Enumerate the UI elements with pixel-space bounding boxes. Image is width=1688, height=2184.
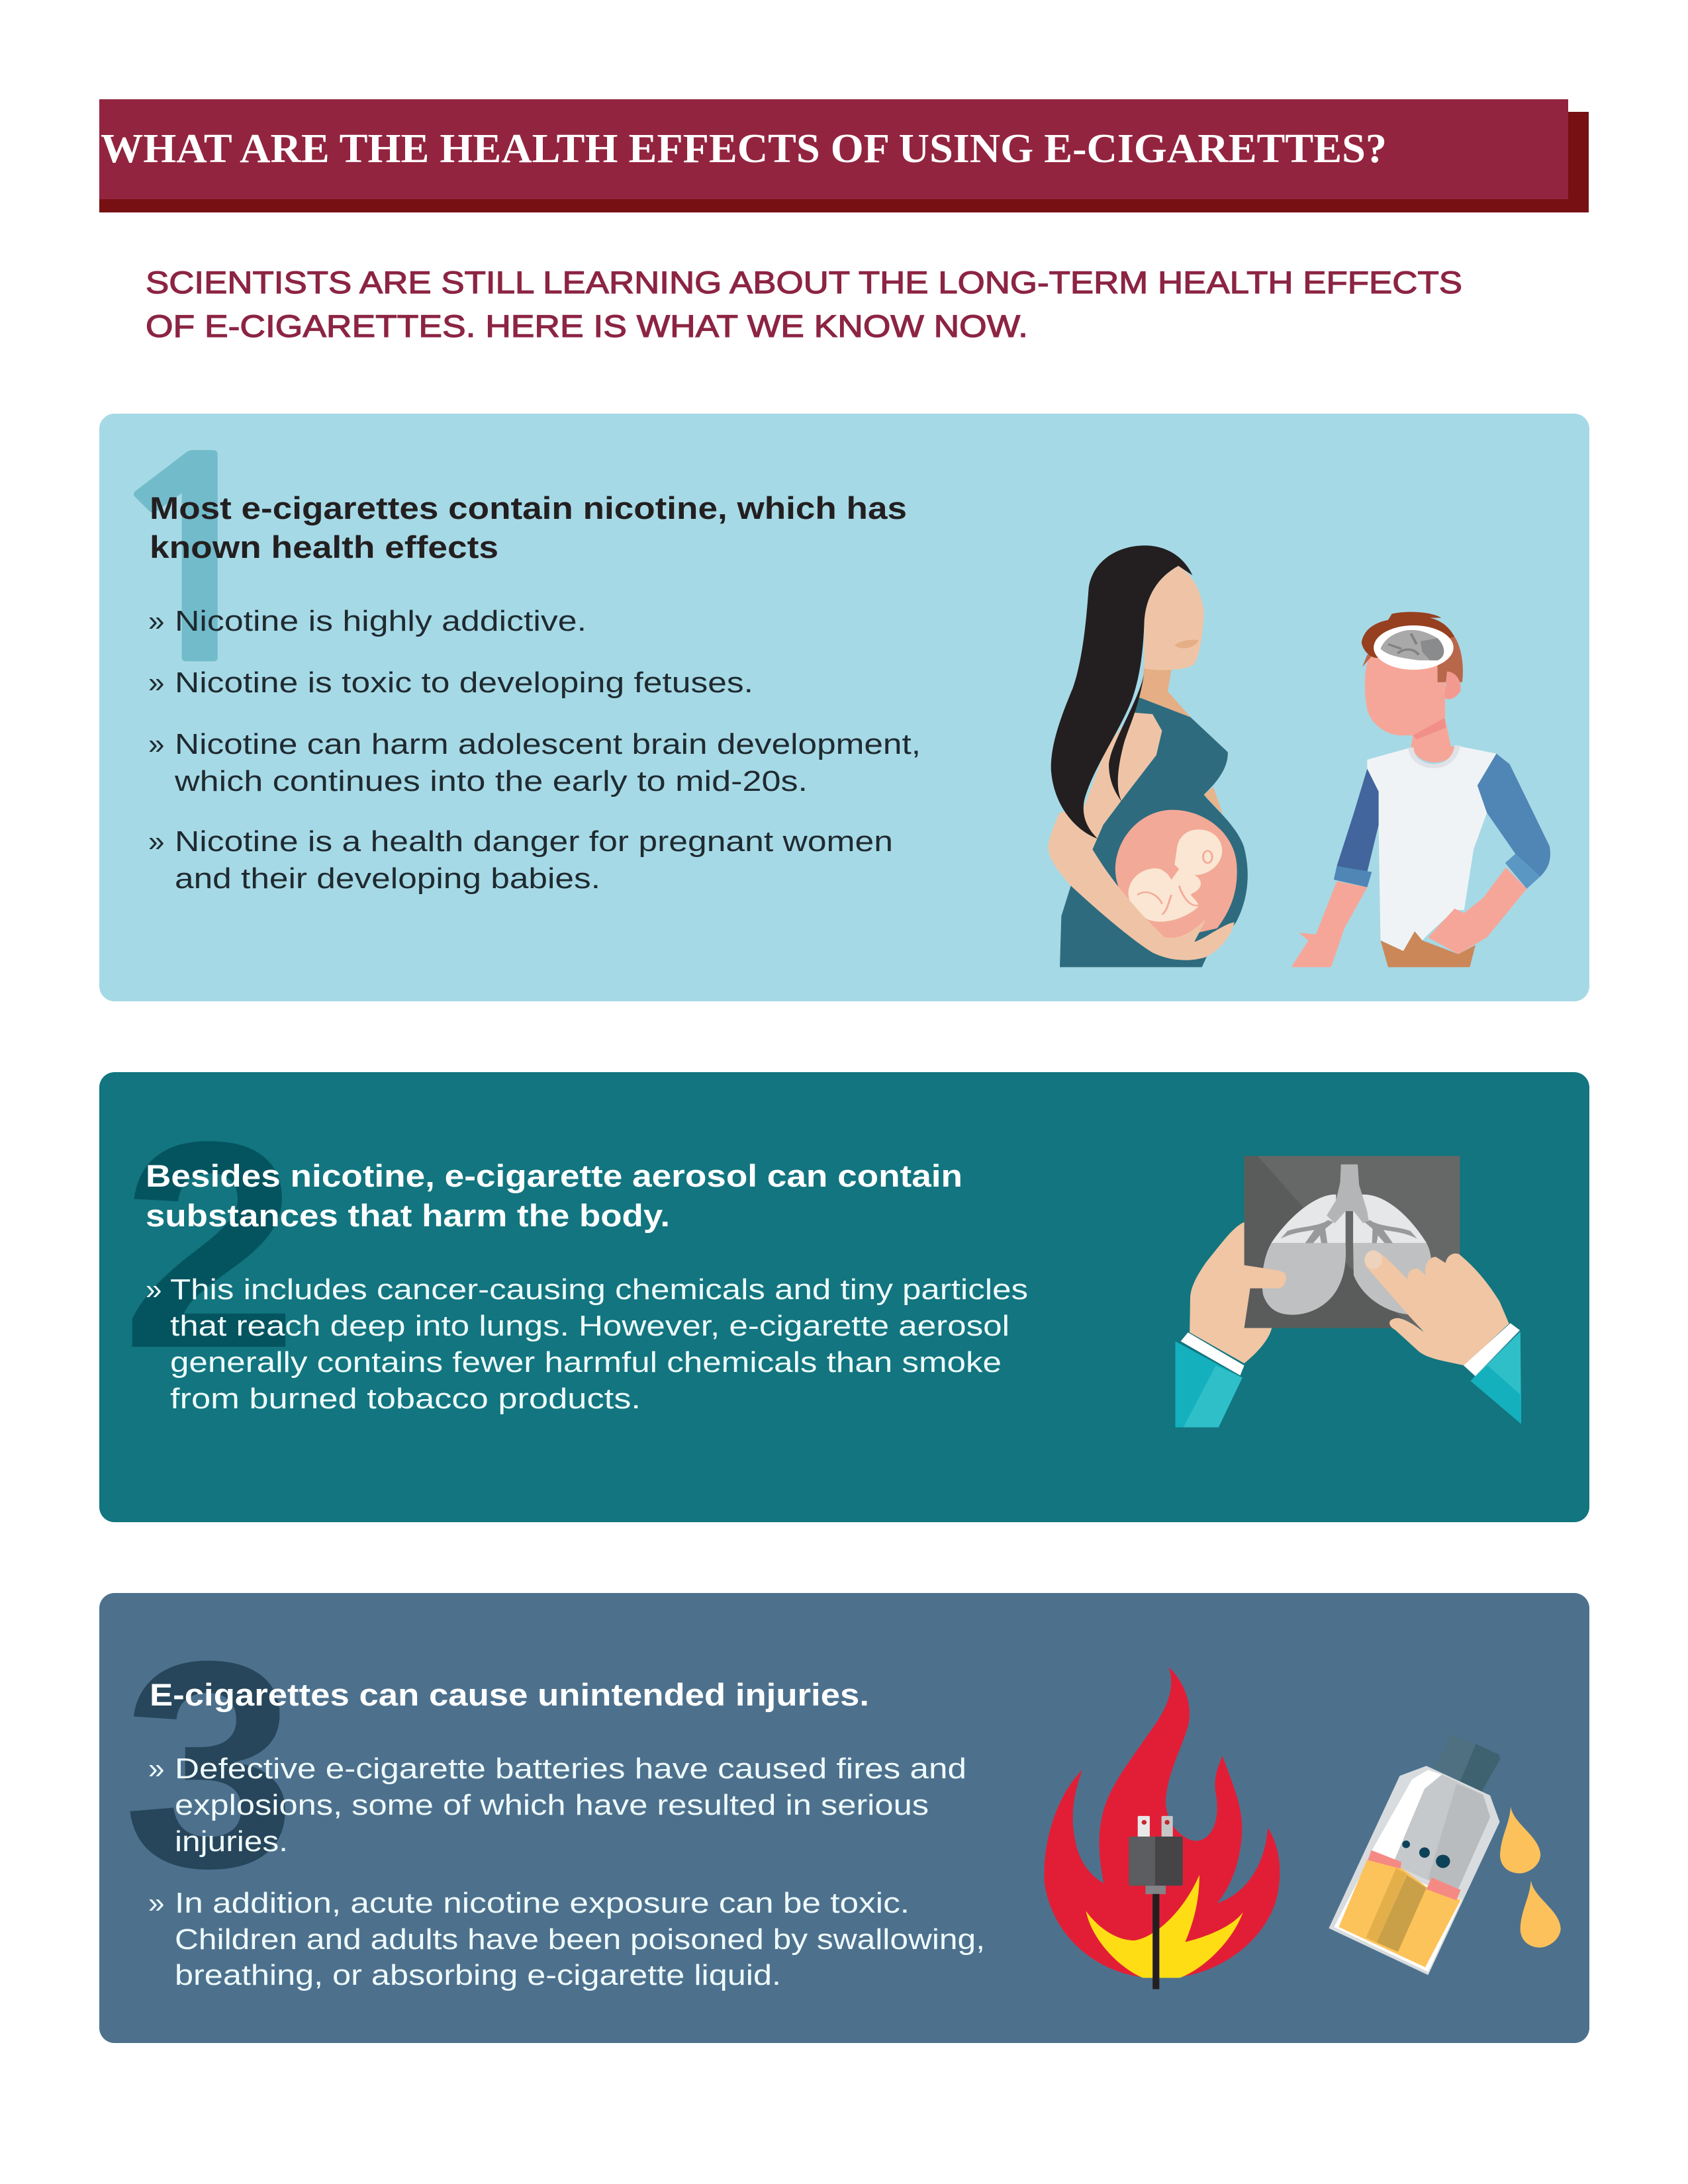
boy: trousers — [1380, 931, 1476, 967]
panel 1: nicotine — [91, 414, 1589, 1001]
bullet list 1: » — [148, 605, 164, 637]
bullet list 1: and their developing babies. — [175, 862, 600, 895]
bullet list 1: Nicotine can harm adolescent brain development, — [175, 728, 921, 760]
bullet list 1: Nicotine is toxic to developing fetuses. — [175, 666, 753, 699]
boy: left sleeve — [1336, 769, 1379, 872]
bullet list 3: In addition, acute nicotine exposure can be toxic. — [175, 1887, 910, 1919]
woman: arm around belly — [1048, 807, 1234, 960]
boy: neck — [1411, 719, 1460, 762]
bullet list 3: Children and adults have been poisoned by swallowing, — [175, 1923, 985, 1956]
bullet list 1: » — [148, 728, 164, 760]
numeral 3: 3 — [123, 1600, 297, 1929]
heading 1: known health effects — [150, 529, 498, 565]
heading 1: Most e-cigarettes contain nicotine, which has — [150, 490, 907, 525]
heading 2: substances that harm the body. — [146, 1198, 670, 1233]
boy: face — [1365, 652, 1445, 735]
plug — [1129, 1816, 1183, 1989]
intro text: SCIENTISTS ARE STILL LEARNING ABOUT THE LONG-TERM HEALTH EFFECTS — [146, 265, 1462, 300]
bullet list 3: breathing, or absorbing e-cigarette liquid. — [175, 1959, 781, 1991]
bullet text 2: » — [146, 1273, 162, 1306]
woman: neck and face — [1139, 664, 1190, 717]
bullet list 1: which continues into the early to mid-20s. — [174, 765, 808, 797]
heading 2 — [146, 1158, 962, 1233]
numeral 1: 1 — [91, 428, 294, 702]
boy: exposed brain — [1374, 625, 1454, 670]
heading 2: Besides nicotine, e-cigarette aerosol can contain — [146, 1158, 962, 1193]
left cuff and sleeve — [1176, 1332, 1244, 1428]
woman: back skin — [1059, 713, 1162, 849]
numeral 2: 2 — [121, 1081, 298, 1410]
title: WHAT ARE THE HEALTH EFFECTS OF USING E-CIGARETTES? — [101, 126, 1387, 171]
bullet text 2: from burned tobacco products. — [170, 1383, 641, 1415]
bullet list 1: » — [148, 825, 164, 858]
heading 1 — [150, 490, 907, 565]
bullet text 2: This includes cancer-causing chemicals and tiny particles — [170, 1273, 1028, 1306]
bullet text 2 — [146, 1273, 1028, 1415]
lungs — [1262, 1164, 1431, 1315]
bullet list 3: » — [148, 1752, 164, 1785]
boy: hair — [1362, 631, 1463, 682]
illustration: burning plug and leaking bottle — [1044, 1667, 1561, 1989]
panel 2: aerosol — [99, 1072, 1589, 1522]
x-ray film — [1244, 1156, 1460, 1328]
bullet list 3: » — [148, 1887, 164, 1919]
boy: t-shirt — [1367, 745, 1497, 951]
bullet list 1: » — [148, 666, 164, 699]
bullet text 2: generally contains fewer harmful chemicals than smoke — [170, 1346, 1002, 1379]
boy: right sleeve — [1477, 754, 1550, 877]
title banner — [99, 99, 1589, 212]
intro text: OF E-CIGARETTES. HERE IS WHAT WE KNOW NOW. — [146, 308, 1028, 343]
left hand — [1190, 1222, 1286, 1363]
bullet text 2: that reach deep into lungs. However, e-cigarette aerosol — [170, 1310, 1009, 1342]
bullet list 3: injuries. — [175, 1825, 288, 1858]
liquid drops — [1500, 1807, 1561, 1948]
bullet list 1: Nicotine is a health danger for pregnant women — [175, 825, 893, 858]
illustration: pregnant woman and teenage boy — [1048, 545, 1550, 967]
heading 3: E-cigarettes can cause unintended injuries. — [150, 1677, 869, 1712]
bullet list 3: explosions, some of which have resulted in serious — [175, 1789, 929, 1821]
right cuff and sleeve — [1464, 1323, 1521, 1424]
bullet list 3: Defective e-cigarette batteries have caused fires and — [175, 1752, 966, 1785]
bullet list 3 — [148, 1752, 985, 1991]
bullet list 1: Nicotine is highly addictive. — [175, 605, 586, 637]
bullet list 1 — [148, 605, 921, 895]
boy: arms — [1291, 868, 1526, 967]
woman: dress — [1060, 698, 1248, 967]
woman: belly and fetus — [1115, 810, 1237, 940]
illustration: hands holding lung x-ray — [1176, 1156, 1521, 1428]
cap — [1433, 1734, 1500, 1794]
bottle — [1329, 1766, 1500, 1975]
panel 3: injuries — [99, 1593, 1589, 2043]
flame — [1044, 1667, 1280, 1978]
woman: hair — [1051, 545, 1192, 839]
intro text — [146, 265, 1462, 343]
right hand pointing — [1364, 1250, 1509, 1365]
